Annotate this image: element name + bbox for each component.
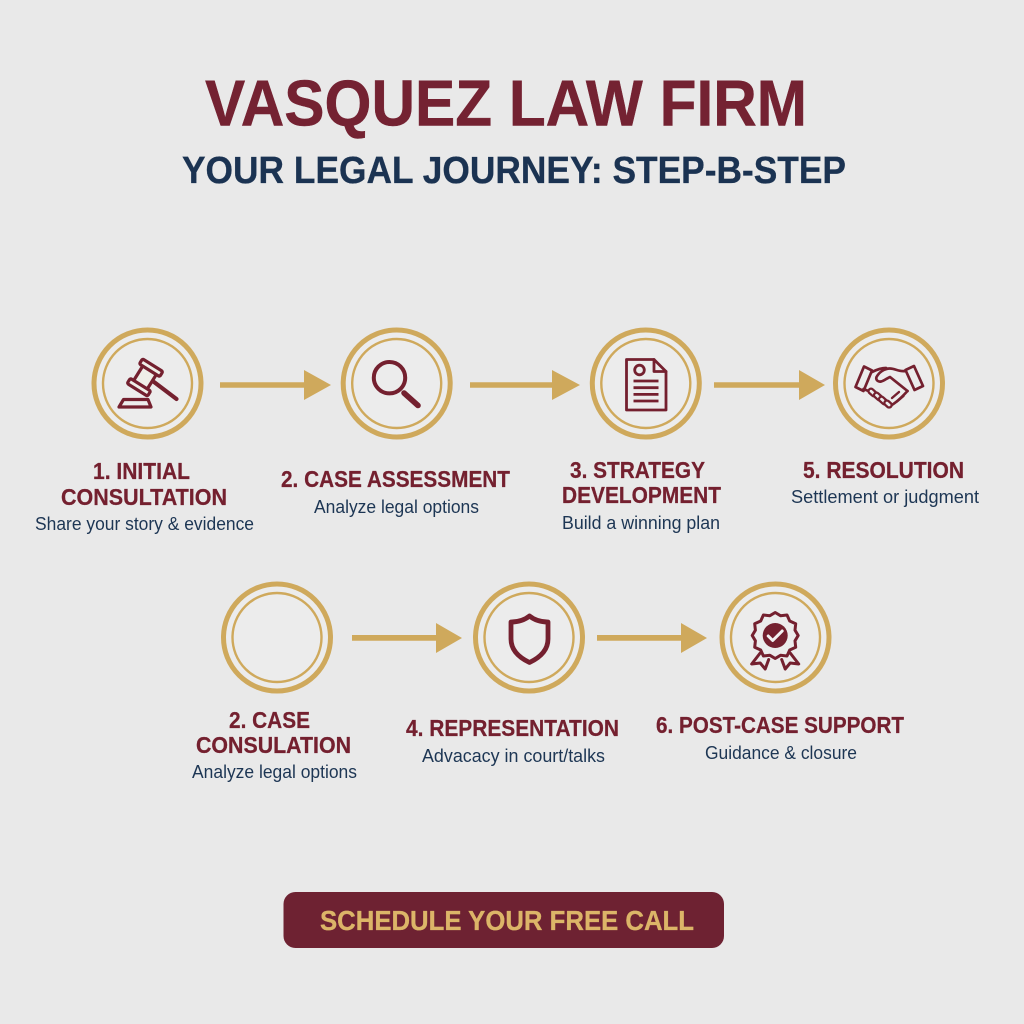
step description: Guidance & closure <box>705 743 857 763</box>
arrow: step 1 to 2 <box>220 370 331 400</box>
step heading: 1. INITIAL <box>93 458 190 484</box>
step heading: CONSULTATION <box>61 484 227 510</box>
arrow: step 3 to 5 <box>714 370 825 400</box>
step heading <box>196 707 351 758</box>
step description: Analyze legal options <box>314 497 479 517</box>
icon ring: magnifying glass <box>343 330 450 437</box>
call-to-action button <box>284 892 724 948</box>
step: 6. post-case support <box>656 584 904 763</box>
step: 2. case consulation <box>192 584 357 782</box>
step heading: 4. REPRESENTATION <box>406 715 619 741</box>
step: 4. representation <box>406 584 619 766</box>
step description: Analyze legal options <box>192 762 357 782</box>
step: 3. strategy development <box>562 330 721 533</box>
subtitle: YOUR LEGAL JOURNEY: STEP-B-STEP <box>182 150 846 192</box>
step heading <box>562 457 721 508</box>
title: VASQUEZ LAW FIRM <box>205 66 807 140</box>
icon ring: handshake <box>836 330 942 437</box>
step description: Settlement or judgment <box>791 487 979 507</box>
step: 5. resolution <box>791 330 979 507</box>
step heading: 2. CASE <box>229 707 310 733</box>
arrow: step 2 to 4 <box>352 623 462 653</box>
step heading: 6. POST-CASE SUPPORT <box>656 712 904 738</box>
arrow: step 2 to 3 <box>470 370 580 400</box>
call-to-action button: SCHEDULE YOUR FREE CALL <box>320 905 694 936</box>
step heading: 5. RESOLUTION <box>803 457 964 483</box>
icon ring: award badge <box>722 584 829 691</box>
arrow: step 4 to 6 <box>597 623 707 653</box>
step heading: CONSULATION <box>196 732 351 758</box>
icon ring: gavel <box>94 330 201 437</box>
step heading: DEVELOPMENT <box>562 482 721 508</box>
step: 1. initial consultation <box>35 330 254 534</box>
icon ring: document <box>592 330 699 437</box>
empty icon ring <box>224 584 330 691</box>
step heading: 2. CASE ASSESSMENT <box>281 466 510 492</box>
step heading: 3. STRATEGY <box>570 457 705 483</box>
icon ring: shield <box>476 584 582 691</box>
step heading <box>61 458 227 510</box>
step: 2. case assessment <box>281 330 510 517</box>
step description: Share your story & evidence <box>35 514 254 534</box>
step description: Build a winning plan <box>562 513 720 533</box>
step description: Advacacy in court/talks <box>422 746 605 766</box>
